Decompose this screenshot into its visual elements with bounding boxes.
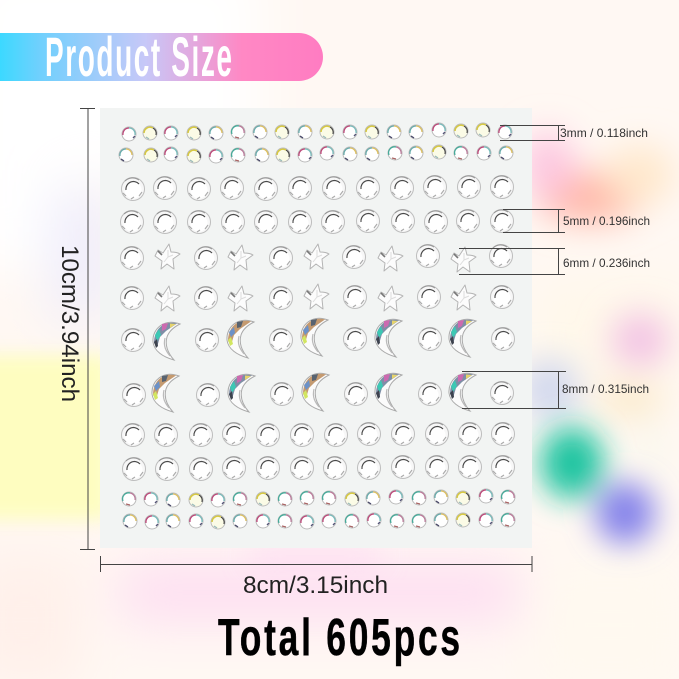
height dimension <box>56 108 95 550</box>
row: 3mm gems bottom <box>122 489 515 529</box>
width label: 8cm/3.15inch <box>243 572 388 599</box>
row: 5mm gems <box>120 176 514 234</box>
callout: 5mm: 5mm / 0.196inch <box>563 214 650 228</box>
width dimension <box>100 556 532 599</box>
row: lower 5mm gems <box>122 422 514 480</box>
callout: 5mm <box>503 209 650 233</box>
header pill <box>0 27 323 89</box>
product sheet <box>100 108 532 548</box>
callout: 8mm <box>462 371 649 409</box>
row: gems and stars <box>120 244 514 311</box>
total count: Total 605pcs <box>218 609 460 667</box>
heading: Product Size: Product Size <box>45 27 232 89</box>
row: gems and moons <box>122 318 514 412</box>
callout: 3mm: 3mm / 0.118inch <box>560 126 648 140</box>
callout: 6mm <box>459 248 650 275</box>
callout: 6mm: 6mm / 0.236inch <box>563 256 650 270</box>
height label: 10cm/3.94inch <box>56 245 83 402</box>
callout: 3mm <box>500 125 648 141</box>
callout: 8mm: 8mm / 0.315inch <box>562 382 649 396</box>
row: 3mm gems top <box>119 123 513 163</box>
